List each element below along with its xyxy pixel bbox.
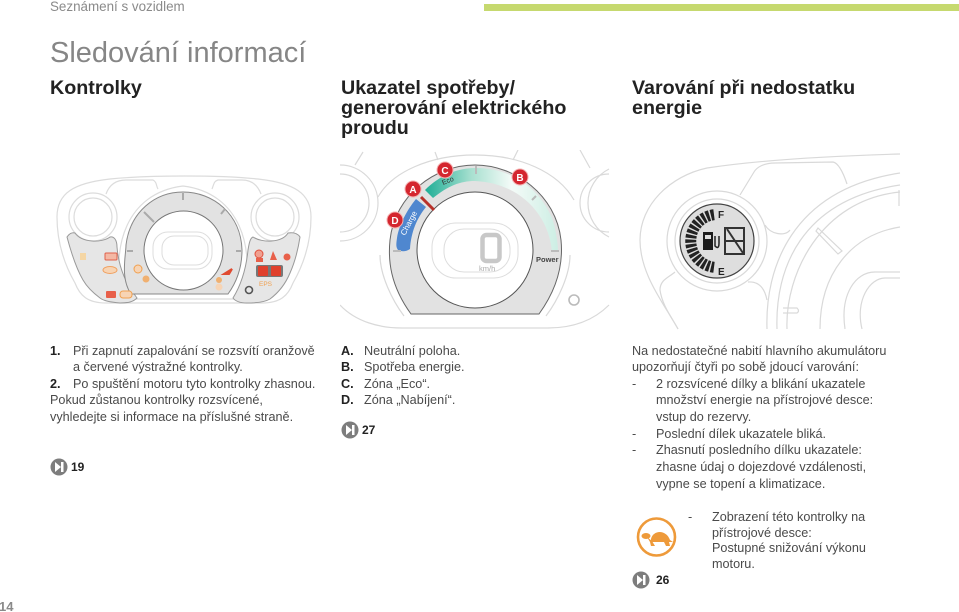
text block: warning lights: Po spuštění motoru tyto kontrolky zhasnou. bbox=[73, 376, 315, 390]
text block: gauge legend: Neutrální poloha. bbox=[364, 344, 460, 358]
green header bar bbox=[484, 4, 959, 11]
panel: consumption gauge: Eco bbox=[441, 176, 455, 187]
text block: warning lights: Pokud zůstanou kontrolky rozsvícené, bbox=[50, 393, 263, 407]
panel: consumption gauge bbox=[340, 150, 610, 329]
panel: consumption gauge: km/h bbox=[479, 264, 495, 273]
text block: gauge legend: A. bbox=[341, 344, 354, 358]
heading: consumption gauge bbox=[341, 76, 566, 138]
panel: low energy gauge: E bbox=[718, 267, 725, 278]
reference: page 27: 27 bbox=[362, 423, 375, 437]
panel: warning lights instrument cluster bbox=[56, 175, 312, 304]
text block: gauge legend bbox=[341, 344, 464, 407]
text block: low energy warnings: Na nedostatečné nabití hlavního akumulátoru bbox=[632, 344, 886, 358]
heading: consumption gauge: Ukazatel spotřeby/ bbox=[341, 76, 515, 98]
panel: consumption gauge: Power bbox=[536, 255, 559, 264]
text block: low energy warnings: - bbox=[632, 443, 636, 457]
text block: turtle warning: Zobrazení této kontrolky na bbox=[712, 510, 865, 524]
text block: low energy warnings bbox=[632, 344, 886, 490]
energy bar segments bbox=[691, 215, 714, 267]
heading: consumption gauge: generování elektrického bbox=[341, 96, 566, 118]
digit zero bbox=[482, 235, 500, 261]
text block: turtle warning: Postupné snižování výkonu bbox=[712, 541, 866, 555]
reference: page 26 bbox=[632, 572, 669, 588]
grey dial bbox=[124, 192, 242, 294]
text block: low energy warnings: vypne se topení a klimatizace. bbox=[656, 476, 825, 490]
panel: low energy gauge: F bbox=[718, 210, 724, 221]
heading: consumption gauge: proudu bbox=[341, 116, 409, 138]
text block: turtle warning: přístrojové desce: bbox=[712, 526, 812, 540]
fuel display bbox=[680, 204, 754, 278]
title: Sledování informací bbox=[50, 37, 306, 69]
text block: turtle warning: - bbox=[688, 510, 692, 524]
heading: low energy warning: Varování při nedostatku bbox=[632, 76, 855, 98]
heading: warning lights: Kontrolky bbox=[50, 76, 142, 98]
text block: low energy warnings: - bbox=[632, 376, 636, 390]
text block: gauge legend: Zóna „Nabíjení“. bbox=[364, 393, 455, 407]
blue charge zone bbox=[396, 199, 426, 251]
warning icons: EPS bbox=[259, 281, 273, 288]
text block: warning lights: a červené výstražné kontrolky. bbox=[73, 360, 243, 374]
heading: low energy warning bbox=[632, 76, 855, 118]
reference: page 19: 19 bbox=[71, 460, 84, 474]
callout markers: C bbox=[441, 166, 449, 177]
left grey telltale panel bbox=[67, 233, 137, 303]
text block: warning lights: 2. bbox=[50, 376, 61, 390]
text block: low energy warnings: Poslední dílek ukazatele bliká. bbox=[656, 426, 826, 440]
text block: gauge legend: B. bbox=[341, 360, 354, 374]
text block: turtle warning bbox=[688, 510, 866, 571]
callout markers: D bbox=[391, 216, 399, 227]
text block: gauge legend: Spotřeba energie. bbox=[364, 360, 464, 374]
text block: gauge legend: C. bbox=[341, 376, 354, 390]
text block: warning lights: 1. bbox=[50, 344, 61, 358]
icon: turtle warning bbox=[636, 517, 676, 557]
reference: page 26: 26 bbox=[656, 573, 669, 587]
warning icons bbox=[80, 250, 290, 298]
text block: turtle warning: motoru. bbox=[712, 557, 755, 571]
segment digit bbox=[725, 228, 744, 254]
heading: low energy warning: energie bbox=[632, 96, 702, 118]
text block: low energy warnings: Zhasnutí posledního dílku ukazatele: bbox=[656, 443, 862, 457]
text block: gauge legend: D. bbox=[341, 393, 354, 407]
text block: low energy warnings: upozorňují čtyři po sobě jdoucí varování: bbox=[632, 360, 859, 374]
white inner display circle bbox=[417, 192, 533, 308]
text block: low energy warnings: vstup do rezervy. bbox=[656, 410, 751, 424]
text block: low energy warnings: množství energie na přístrojové desce: bbox=[656, 393, 873, 407]
fuel pump icon bbox=[703, 232, 719, 250]
text block: low energy warnings: - bbox=[632, 426, 636, 440]
text block: warning lights bbox=[50, 344, 315, 424]
text block: warning lights: Při zapnutí zapalování se rozsvítí oranžově bbox=[73, 344, 315, 358]
callout markers bbox=[387, 162, 528, 228]
reference: page 19 bbox=[50, 458, 84, 476]
callout markers: B bbox=[516, 173, 524, 184]
callout markers: A bbox=[409, 185, 417, 196]
text block: low energy warnings: 2 rozsvícené dílky a blikání ukazatele bbox=[656, 376, 865, 390]
text block: low energy warnings: zhasne údaj o dojezdové vzdálenosti, bbox=[656, 460, 866, 474]
grey dial face bbox=[389, 165, 562, 314]
panel: low energy gauge bbox=[640, 153, 900, 330]
right grey telltale panel bbox=[233, 233, 300, 303]
reference: page 27 bbox=[342, 422, 375, 438]
text block: gauge legend: Zóna „Eco“. bbox=[364, 376, 430, 390]
text block: warning lights: vyhledejte si informace na příslušné straně. bbox=[50, 410, 293, 424]
panel: consumption gauge: Charge bbox=[399, 209, 419, 237]
red neutral marker bbox=[421, 197, 434, 210]
